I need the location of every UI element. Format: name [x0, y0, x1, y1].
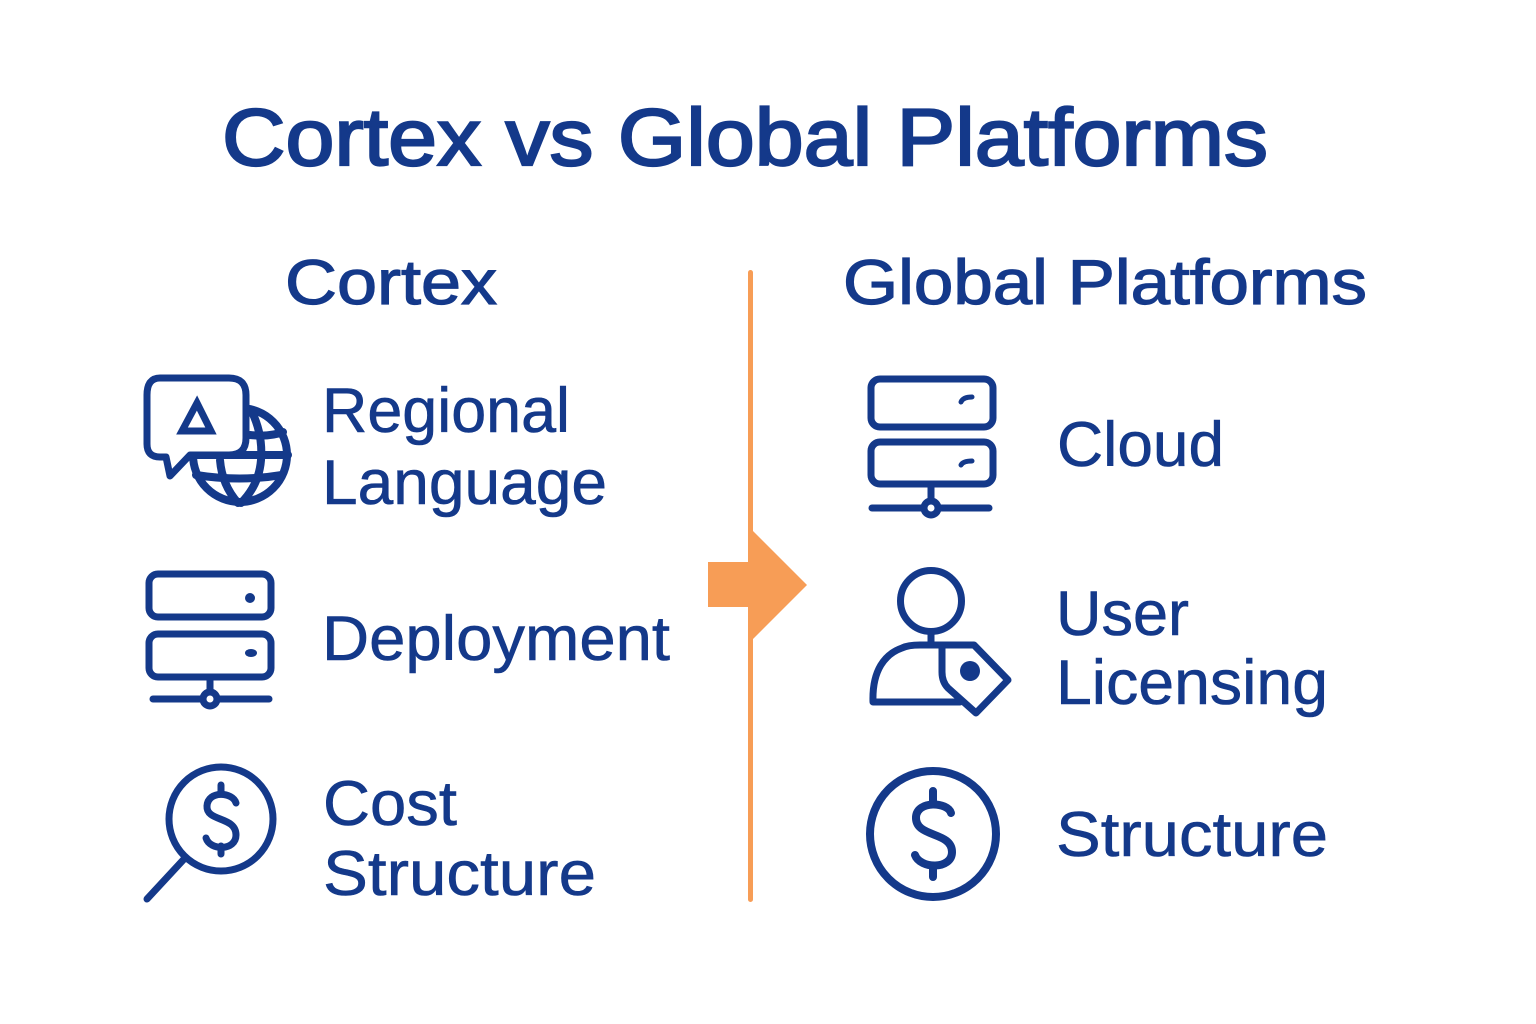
icon: magnifier with dollar: [147, 767, 273, 899]
icon: language speech bubble and globe: [147, 378, 288, 503]
text: Regional Language: Regional: [322, 376, 570, 446]
text: Deployment: Deployment: [322, 604, 671, 674]
icon: dollar coin: [870, 771, 996, 897]
divider with arrow: [708, 270, 807, 902]
heading: Global Platforms: Global Platforms: [843, 248, 1367, 318]
title: Cortex vs Global Platforms: [222, 93, 1268, 183]
panel: Global Platforms: [843, 248, 1367, 897]
text: Structure: Structure: [1056, 800, 1328, 870]
text: Cost Structure: [323, 769, 596, 909]
text: User Licensing: [1056, 579, 1328, 718]
text: User Licensing: User: [1056, 579, 1189, 649]
text: Cloud: Cloud: [1057, 410, 1224, 480]
icon: user with price tag: [873, 570, 1008, 713]
heading: Cortex: Cortex: [285, 248, 497, 318]
icon: server: [149, 574, 271, 706]
text: Cost Structure: Structure: [323, 839, 596, 909]
text: Regional Language: [322, 376, 607, 518]
text: Regional Language: Language: [322, 448, 607, 518]
text: User Licensing: Licensing: [1056, 648, 1328, 718]
text: Cost Structure: Cost: [323, 769, 458, 839]
panel: Cortex: [147, 248, 671, 909]
icon: cloud server: [871, 379, 993, 515]
